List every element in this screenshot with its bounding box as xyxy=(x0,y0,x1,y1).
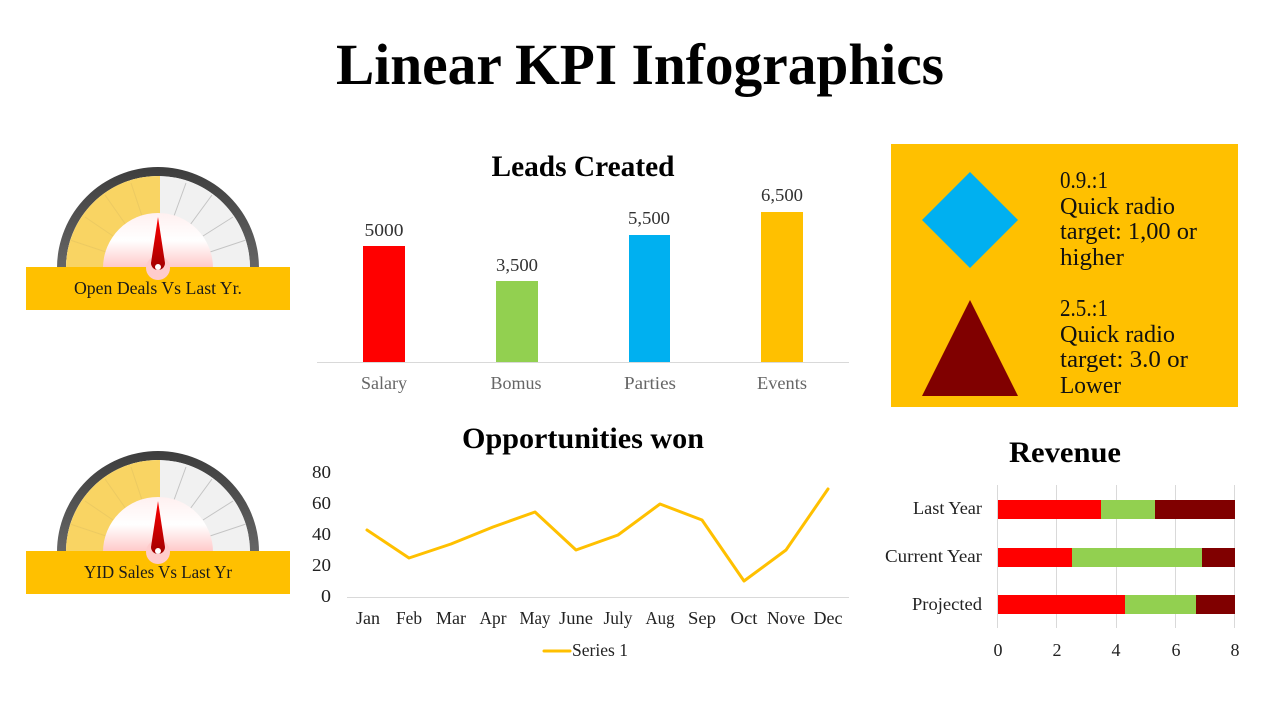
month labels: Oct xyxy=(730,608,758,628)
bars: current year xyxy=(998,548,1235,567)
category labels xyxy=(361,373,807,393)
x axis labels: 0 xyxy=(994,640,1002,660)
stacked bar chart: revenue xyxy=(885,436,1240,660)
month labels: Feb xyxy=(396,608,422,628)
value labels: 5000 xyxy=(364,220,404,240)
y axis labels: 20 xyxy=(312,555,331,575)
category labels xyxy=(885,498,982,614)
month labels: Mar xyxy=(436,608,466,628)
text: quick ratio 0.9: higher xyxy=(1060,245,1124,271)
bars xyxy=(363,212,803,362)
x axis labels xyxy=(994,640,1240,660)
month labels: Jan xyxy=(356,608,380,628)
y axis labels xyxy=(312,462,331,606)
text: quick ratio 2.5: 2.5.:1 xyxy=(1060,296,1108,322)
value labels: 3,500 xyxy=(496,255,538,275)
month labels: Aug xyxy=(646,608,675,628)
series line xyxy=(367,489,828,581)
y axis labels: 40 xyxy=(312,524,331,544)
value labels: 5,500 xyxy=(628,208,670,228)
bars: last year xyxy=(998,500,1235,519)
gauge label band xyxy=(26,551,290,594)
text: quick ratio 0.9 xyxy=(1060,168,1197,271)
heading: Leads Created xyxy=(492,150,675,183)
x axis labels: 4 xyxy=(1112,640,1120,660)
gauge dial xyxy=(57,451,259,552)
text: quick ratio 2.5: Lower xyxy=(1060,373,1121,399)
y axis labels: 0 xyxy=(321,586,331,606)
title: Linear KPI Infographics xyxy=(336,32,944,97)
legend: Series 1 xyxy=(572,640,628,660)
gauge dial xyxy=(57,167,259,268)
text: quick ratio 2.5: target: 3.0 or xyxy=(1060,347,1188,373)
month labels: June xyxy=(559,608,593,628)
bar chart: leads created xyxy=(317,150,849,393)
gauge needle xyxy=(146,217,170,280)
month labels: Dec xyxy=(814,608,843,628)
gauge label band: YID Sales Vs Last Yr xyxy=(84,562,232,582)
month labels: July xyxy=(604,608,633,628)
text: quick ratio 0.9: Quick radio xyxy=(1060,194,1175,220)
line chart: opportunities won xyxy=(312,422,849,660)
month labels: May xyxy=(520,608,551,628)
month labels: Nove xyxy=(767,608,805,628)
icon: triangle xyxy=(922,300,1018,396)
month labels: Sep xyxy=(688,608,716,628)
category labels: Last Year xyxy=(913,498,982,518)
category labels: Events xyxy=(757,373,807,393)
category labels: Bomus xyxy=(490,373,542,393)
panel: ratio targets xyxy=(891,144,1238,407)
month labels: Apr xyxy=(480,608,507,628)
category labels: Current Year xyxy=(885,546,982,566)
text: quick ratio 0.9: 0.9.:1 xyxy=(1060,168,1108,194)
heading: Revenue xyxy=(1009,436,1121,469)
category labels: Salary xyxy=(361,373,407,393)
icon: diamond xyxy=(922,172,1018,268)
gauge: open deals xyxy=(26,167,290,310)
gauge: yid sales xyxy=(26,451,290,594)
category labels: Parties xyxy=(624,373,676,393)
heading: Opportunities won xyxy=(462,422,704,455)
bars: projected xyxy=(998,595,1235,614)
gauge label band: Open Deals Vs Last Yr. xyxy=(74,278,242,298)
text: quick ratio 2.5: Quick radio xyxy=(1060,322,1175,348)
x axis labels: 8 xyxy=(1230,640,1240,660)
text: quick ratio 2.5 xyxy=(1060,296,1188,399)
y axis labels: 60 xyxy=(312,493,331,513)
legend xyxy=(544,640,628,660)
month labels xyxy=(356,608,843,628)
gauge needle xyxy=(146,501,170,564)
x axis labels: 2 xyxy=(1052,640,1062,660)
y axis labels: 80 xyxy=(312,462,331,482)
text: quick ratio 0.9: target: 1,00 or xyxy=(1060,219,1197,245)
category labels: Projected xyxy=(912,594,982,614)
gauge label band xyxy=(26,267,290,310)
x axis labels: 6 xyxy=(1172,640,1180,660)
value labels: 6,500 xyxy=(761,185,803,205)
value labels xyxy=(364,185,803,275)
